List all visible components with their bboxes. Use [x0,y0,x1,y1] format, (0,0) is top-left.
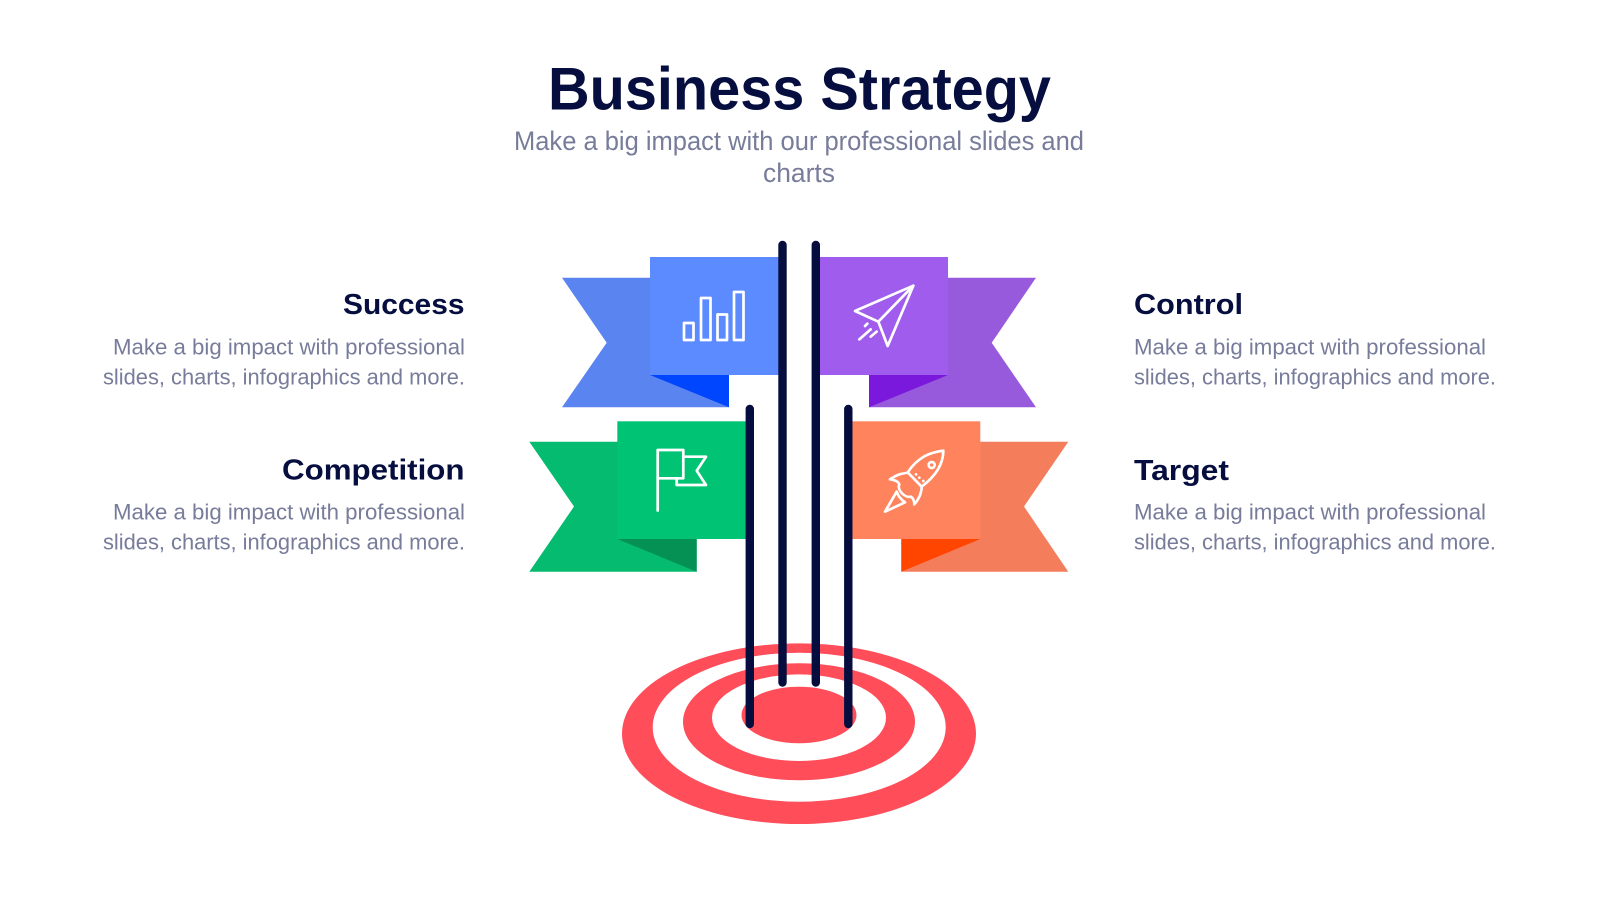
text block: Competition: slides, charts, infographics and more. [103,530,465,554]
flag: Success (blue) [562,257,780,407]
icon: paper plane [855,286,913,346]
text block: Success: Success [343,289,464,321]
subtitle: Make a big impact with our professional slides and [514,126,1084,156]
flag: Target (orange) [850,421,1068,572]
text block: Control: Make a big impact with professional [1134,334,1486,360]
flag: Control (purple) [818,257,1036,407]
subtitle: charts [763,158,835,188]
text block: Target: slides, charts, infographics and more. [1134,530,1496,554]
text block: Competition [103,454,465,554]
text block: Target: Target [1134,455,1229,487]
text block: Target [1134,455,1496,554]
icon: bar chart [684,292,744,340]
target bullseye [622,643,976,824]
title: Business Strategy [548,56,1052,122]
text block: Control: slides, charts, infographics and more. [1134,364,1496,390]
text block: Competition: Make a big impact with professional [113,500,465,524]
text block: Success: slides, charts, infographics and more. [103,364,465,390]
text block: Control: Control [1134,289,1243,321]
text block: Competition: Competition [282,454,464,486]
text block: Success: Make a big impact with professional [113,334,465,360]
icon: flag [658,450,706,510]
text block: Success [103,289,465,390]
subtitle [514,126,1084,188]
icon: rocket [885,451,943,512]
text block: Target: Make a big impact with professional [1134,500,1486,524]
text block: Control [1134,289,1496,390]
flag poles [750,245,848,724]
flag: Competition (green) [529,421,747,572]
